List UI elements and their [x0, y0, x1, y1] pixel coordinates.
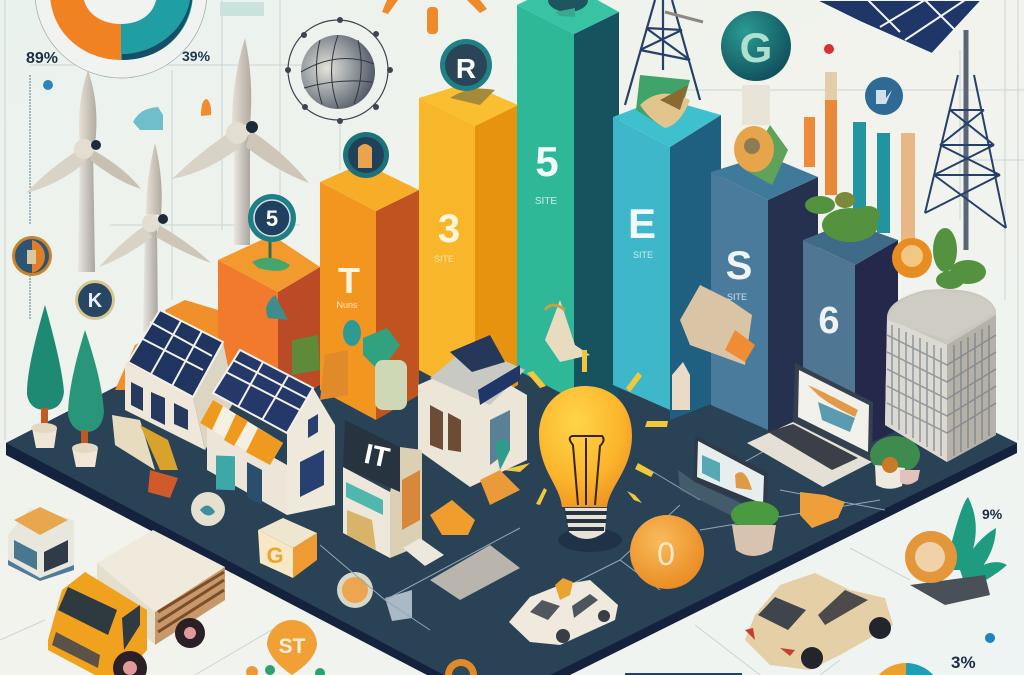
icon: K badge: K: [88, 290, 103, 312]
house 2 with awning: [200, 350, 335, 515]
bar: slate S: SITE: [727, 292, 747, 302]
bar: orange T: T: [338, 260, 360, 301]
icon: orange coin badge: [12, 236, 52, 276]
gold coin on road: [337, 572, 373, 608]
percent label: 89%: 89%: [26, 50, 58, 67]
bottom dark bar: [625, 673, 742, 675]
wind turbine 1: [26, 70, 141, 272]
bar: orange small: [115, 235, 320, 410]
plant on blue bar: [636, 75, 690, 128]
bar: yellow 3: 3: [438, 207, 460, 251]
tan car: [745, 573, 893, 670]
bar: green 5: SITE: [535, 196, 557, 207]
office tower building: [885, 289, 996, 462]
badge: top of green bar: [548, 0, 588, 17]
desk scene: [430, 545, 520, 600]
road lines: [320, 420, 885, 630]
transmission tower: left: [625, 0, 703, 105]
gold coin with leaves: [905, 497, 1007, 605]
badge: R: R: [456, 53, 476, 84]
badge: door: [343, 132, 389, 178]
icon: blue circle badge: [865, 77, 903, 115]
leafy plant on navy bar: [805, 192, 880, 242]
wind turbine 3: [172, 38, 309, 245]
gold coin and plant on tower: [892, 228, 986, 289]
icon: K badge: [75, 280, 115, 320]
icon: faded teal glyph: [133, 107, 163, 130]
bar: blue E: E: [628, 200, 656, 247]
icon: red dot: [824, 44, 834, 54]
percent label: 3%: 3%: [951, 653, 976, 672]
G cube: [258, 518, 317, 578]
bar: green 5: 5: [535, 138, 559, 185]
percent label: 9%: 9%: [982, 506, 1003, 522]
IT storefront building: [343, 420, 422, 558]
bar: navy 6: [803, 222, 898, 450]
E circle badge on stem: [721, 11, 791, 125]
potted plant: monitor side: [731, 501, 779, 556]
white car on platform: [509, 578, 618, 645]
IT storefront building: IT: [362, 438, 392, 473]
white tray: [403, 538, 444, 566]
icon: blue dot: [985, 633, 995, 643]
donut chart: top left: [35, 0, 207, 78]
wind turbine 2: [99, 143, 211, 332]
ST pin marker: ST: [279, 635, 306, 658]
potted plant: laptop side: [870, 436, 920, 489]
orange clutter between bars: [292, 320, 407, 410]
badge: 5: [248, 194, 296, 271]
building: store with rooftop solar: [418, 335, 527, 487]
E circle badge on stem: G: [740, 24, 772, 71]
orange cheese package: [800, 492, 845, 528]
gold coin: bottom: [445, 659, 477, 675]
badge: 5: 5: [266, 206, 278, 231]
badge: R: [440, 39, 495, 105]
bar: blue E: [613, 98, 721, 420]
coin and leaves on slate bar: [734, 125, 788, 185]
bar: slate S: S: [726, 244, 752, 288]
bar: yellow 3: [419, 83, 518, 410]
bar: orange T: [320, 163, 419, 420]
bar: orange T: Nuns: [336, 300, 358, 310]
crate icon: [8, 507, 74, 581]
light bulb: [539, 386, 632, 552]
small orange parcel: [430, 500, 475, 535]
small plant at bottom: [246, 665, 325, 675]
monitor: [678, 435, 768, 520]
small gray building icon: [385, 590, 412, 621]
bar: yellow 3: SITE: [434, 254, 454, 264]
bar: blue E: SITE: [633, 250, 653, 260]
small bar chart behind: [804, 72, 915, 248]
ST pin marker: [267, 620, 317, 675]
orange ball: [630, 515, 704, 589]
icon: small blue dot: [43, 80, 53, 90]
percent label: 39%: 39%: [182, 48, 211, 64]
tree 1: [27, 305, 64, 448]
flower figure: [480, 439, 520, 505]
laptop: [747, 363, 873, 487]
orange sun rays: [382, 0, 487, 34]
bar: navy 6: 6: [818, 300, 840, 342]
bar: green 5: [517, 0, 619, 420]
orange ball: 0: [657, 536, 675, 572]
delivery truck: [48, 530, 225, 675]
scattered figurines by teal bar: [545, 285, 755, 410]
light beams: [500, 350, 668, 505]
shopping bags and small items: [112, 415, 225, 526]
transmission tower: right: [925, 30, 1006, 250]
house 1 with solar panel: [125, 310, 235, 450]
G cube: G: [266, 543, 284, 568]
globe with wire frame: [285, 17, 393, 124]
icon: orange tab: [201, 99, 211, 116]
bar: slate S: [711, 155, 818, 440]
faded teal tab at top: [220, 2, 264, 16]
tree 2: [68, 330, 104, 467]
isometric platform: [6, 190, 1017, 675]
pie chart: bottom right: [869, 663, 943, 675]
solar panel top right: [815, 0, 982, 54]
